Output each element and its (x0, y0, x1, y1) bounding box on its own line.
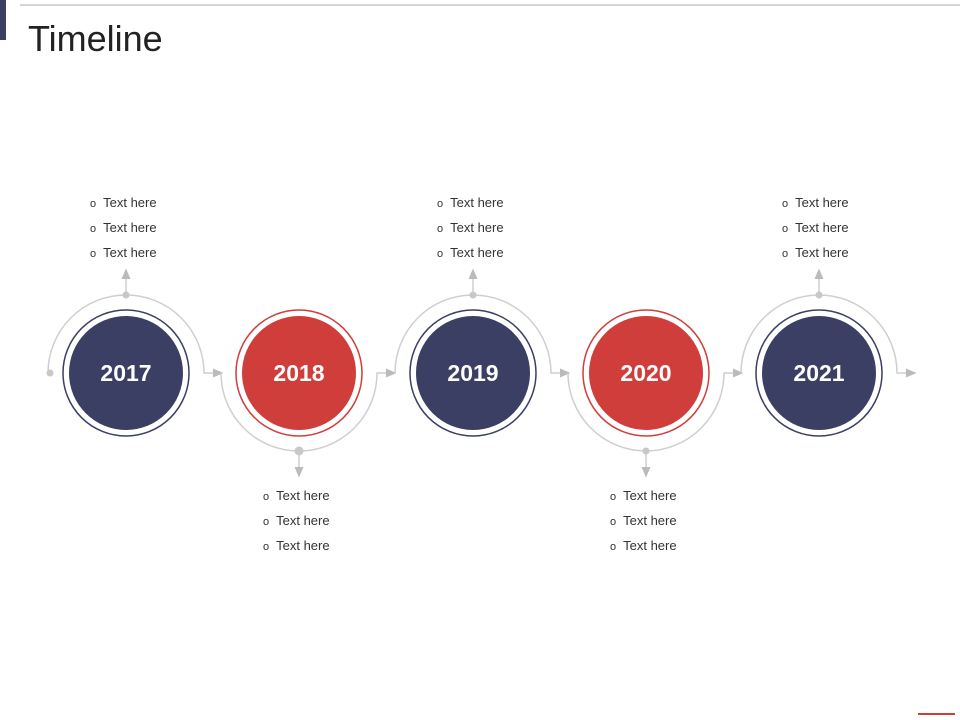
text 2018: Text here (276, 538, 330, 553)
top rule (20, 4, 960, 6)
text 2017 (90, 195, 157, 260)
year circles: 2019 (447, 360, 499, 386)
text 2021 (782, 195, 849, 260)
text 2020: Text here (623, 488, 677, 503)
text 2021: Text here (795, 195, 849, 210)
bottom accent (918, 713, 955, 715)
text 2021: Text here (795, 220, 849, 235)
year circles: 2017 (100, 360, 152, 386)
text 2019 (438, 195, 504, 260)
text 2020: Text here (623, 538, 677, 553)
year circles: 2021 (793, 360, 845, 386)
text 2019: Text here (450, 245, 504, 260)
text 2018 (264, 488, 330, 553)
year circles (63, 310, 882, 436)
text 2020: Text here (623, 513, 677, 528)
text 2018: Text here (276, 513, 330, 528)
text 2021: Text here (795, 245, 849, 260)
text 2019: Text here (450, 195, 504, 210)
connector arcs (48, 270, 915, 476)
year circles: 2020 (620, 360, 672, 386)
text 2017: Text here (103, 195, 157, 210)
text 2017: Text here (103, 220, 157, 235)
text 2019: Text here (450, 220, 504, 235)
text 2018: Text here (276, 488, 330, 503)
title: Timeline (28, 18, 163, 59)
left accent bar (0, 0, 6, 40)
year circles: 2018 (273, 360, 325, 386)
text 2020 (610, 488, 677, 553)
text 2017: Text here (103, 245, 157, 260)
